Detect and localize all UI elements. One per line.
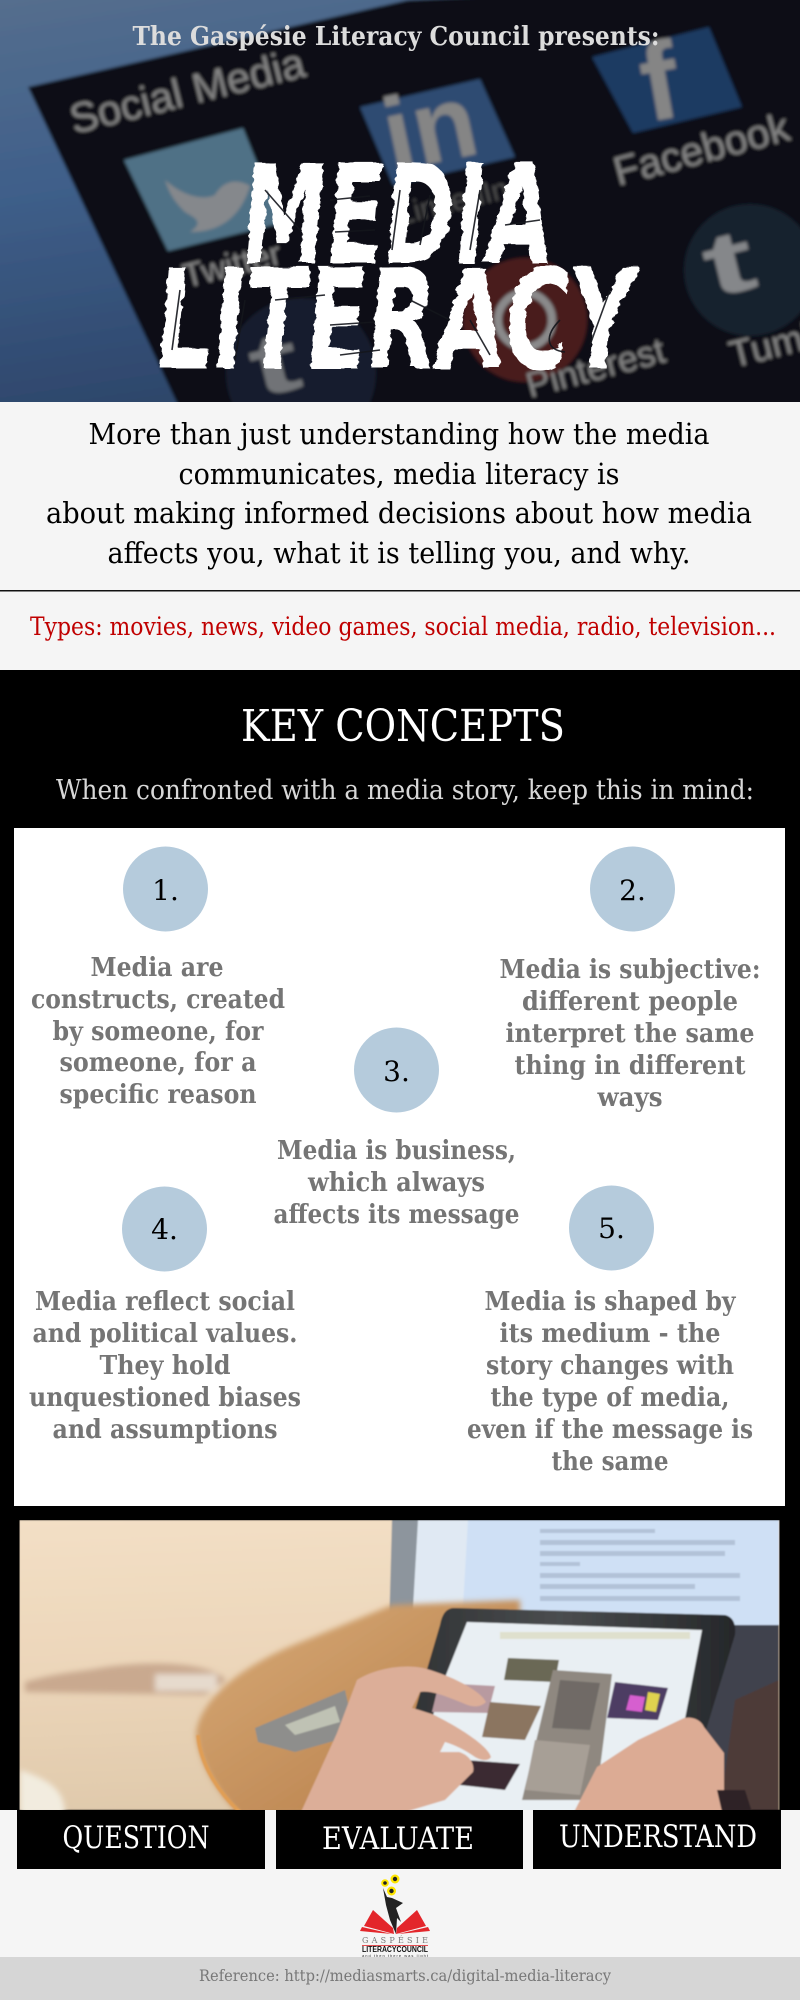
logo wordmark: GASPÉSIE <box>362 1936 428 1945</box>
hero photo: phone with social media icons: Social Media <box>65 39 310 143</box>
concept 2: different people <box>522 987 738 1017</box>
concept 4 <box>29 1186 301 1445</box>
concept 2 <box>500 846 760 1113</box>
action label: question <box>17 1810 265 1869</box>
concept 1: someone, for a <box>60 1048 257 1078</box>
hero photo: phone with social media icons: Twitter <box>179 235 285 296</box>
concept 4: They hold <box>100 1351 230 1381</box>
concept 2: interpret the same <box>506 1019 754 1049</box>
concept 1: Media are <box>90 953 224 983</box>
hero photo: phone with social media icons: LinkedIn <box>394 172 512 232</box>
concept 5: its medium - the <box>500 1319 720 1349</box>
intro paragraph <box>46 417 752 570</box>
hero photo: phone with social media icons: t <box>239 311 310 416</box>
concept 1: specific reason <box>60 1080 257 1110</box>
concept 4: and assumptions <box>52 1415 278 1445</box>
intro paragraph: communicates, media literacy is <box>178 457 620 491</box>
concept 3: Media is business, <box>277 1136 516 1166</box>
concept 2: 2. <box>619 874 646 907</box>
subheading: When confronted with a media story, keep this in mind: <box>56 775 754 806</box>
concept 4: 4. <box>151 1213 178 1246</box>
concept 5: the same <box>552 1447 668 1477</box>
concept 1 <box>31 846 285 1110</box>
intro paragraph: about making informed decisions about how media <box>46 496 752 530</box>
concept 2: thing in different <box>514 1051 746 1081</box>
title: media literacy <box>159 161 640 370</box>
logo: Gaspésie Literacy Council <box>360 1874 430 1958</box>
intro paragraph: More than just understanding how the media <box>88 417 710 451</box>
action label: evaluate: EVALUATE <box>322 1821 474 1857</box>
concept 3: affects its message <box>274 1200 520 1230</box>
presenter line: The Gaspésie Literacy Council presents: <box>132 22 660 52</box>
concept 2: Media is subjective: <box>500 955 760 985</box>
concept 3: 3. <box>383 1055 410 1088</box>
heading: key concepts: KEY CONCEPTS <box>241 701 565 752</box>
intro paragraph: affects you, what it is telling you, and why. <box>108 536 690 570</box>
panel: hero banner <box>0 0 800 402</box>
action label: understand: UNDERSTAND <box>559 1819 757 1855</box>
concept 2: ways <box>597 1083 662 1113</box>
concept 3: which always <box>307 1168 485 1198</box>
icon: reaching person <box>383 1888 403 1934</box>
photo: hands using a tablet <box>19 1520 780 1815</box>
concept 3 <box>274 1028 520 1230</box>
concept 1: constructs, created <box>31 985 285 1015</box>
action label: understand <box>533 1810 781 1869</box>
concept 4: and political values. <box>32 1319 298 1349</box>
concept 1: 1. <box>152 874 179 907</box>
concept 1: by someone, for <box>52 1017 264 1047</box>
panel: key concepts background <box>0 670 800 1810</box>
hero photo: phone with social media icons: Pinterest <box>521 329 669 406</box>
icon: stars <box>381 1874 400 1896</box>
concept 5: story changes with <box>486 1351 734 1381</box>
footer bar: reference <box>0 1957 800 2000</box>
concept 5: Media is shaped by <box>484 1287 736 1317</box>
action label: evaluate <box>276 1810 523 1869</box>
logo wordmark <box>362 1936 429 1958</box>
concept 5: the type of media, <box>490 1383 730 1413</box>
hero photo: phone with social media icons: Facebook <box>608 104 795 195</box>
concept 5 <box>467 1186 753 1477</box>
hero photo: phone with social media icons: f <box>631 18 689 146</box>
logo wordmark: LITERACYCOUNCIL <box>362 1945 428 1954</box>
concept 4: unquestioned biases <box>29 1383 301 1413</box>
concept 5: 5. <box>598 1212 625 1245</box>
panel: five concepts <box>14 828 785 1506</box>
title: media literacy: MEDIA <box>235 135 559 296</box>
hero photo: phone with social media icons: t <box>693 209 765 317</box>
concept 4: Media reflect social <box>35 1287 295 1317</box>
footer bar: reference: Reference: http://mediasmarts.ca/digital-media-literacy <box>199 1966 611 1985</box>
panel: introduction <box>0 417 800 641</box>
icon: open red book <box>360 1910 430 1934</box>
logo wordmark: and then there was light <box>362 1953 429 1958</box>
hero photo: phone with social media icons <box>0 0 800 402</box>
concept 5: even if the message is <box>467 1415 753 1445</box>
hero photo: phone with social media icons: in <box>373 62 487 194</box>
action label: question: QUESTION <box>62 1820 210 1856</box>
